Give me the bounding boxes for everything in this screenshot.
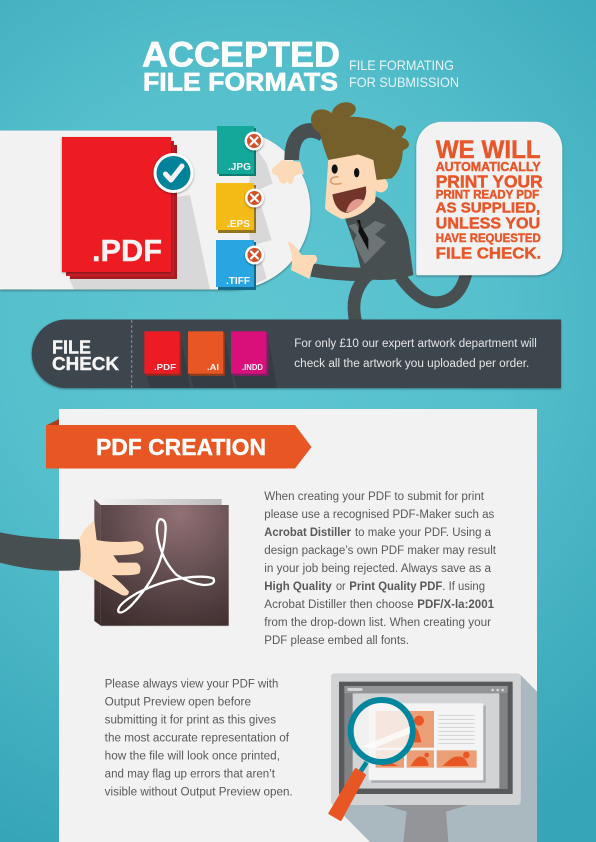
- ribbon heading: [46, 419, 312, 468]
- character raised arm: [292, 131, 323, 160]
- character eyes: [332, 164, 359, 177]
- icon: acrobat book and hand: [0, 499, 229, 626]
- body text two: [105, 679, 293, 799]
- body text one: in your job being rejected. Always save as a: [264, 563, 492, 575]
- character hair: [311, 102, 409, 180]
- icon: pdf file stack: .PDF: [92, 233, 162, 268]
- subtitle: [349, 57, 459, 90]
- body text one: [264, 491, 497, 647]
- icon: pdf card: [144, 331, 182, 376]
- magnifier lens: [351, 700, 413, 762]
- panel: pdf creation: [0, 409, 537, 842]
- callout: UNLESS YOU: [436, 215, 540, 232]
- file check description: [294, 338, 537, 370]
- body text one: from the drop-down list. When creating your: [264, 617, 491, 629]
- character mouth: [332, 186, 366, 213]
- character legs: [354, 272, 467, 322]
- body text two: and may flag up errors that aren’t: [105, 769, 276, 781]
- character face: [325, 154, 377, 219]
- body text two: how the file will look once printed,: [105, 751, 280, 763]
- callout: HAVE REQUESTED: [436, 233, 541, 245]
- file check description: check all the artwork you uploaded per order.: [294, 358, 529, 370]
- icon: ai card: [188, 331, 225, 376]
- character suit: [345, 197, 413, 280]
- ribbon heading: PDF CREATION: [96, 434, 266, 460]
- body text one: High Quality: [264, 581, 332, 593]
- body text two: submitting it for print as this gives: [105, 715, 276, 727]
- body text one: Acrobat Distiller then choose: [264, 599, 414, 611]
- title: FILE FORMATS: [143, 69, 338, 97]
- file check description: For only £10 our expert artwork department will: [294, 338, 537, 350]
- character neck and collar: [345, 195, 378, 228]
- panel: file check bar: [32, 320, 561, 388]
- file check card shadows: [146, 335, 277, 388]
- icon: eps file: [216, 183, 264, 233]
- callout: AS SUPPLIED,: [436, 200, 540, 216]
- body text one: design package’s own PDF maker may result: [264, 545, 497, 557]
- panel: white banner: [0, 130, 310, 290]
- icon: jpg file: [217, 126, 264, 176]
- icon: eps file: .EPS: [227, 219, 250, 230]
- character ear: [373, 178, 388, 192]
- body text one: to make your PDF. Using a: [355, 527, 492, 539]
- callout: FILE CHECK.: [436, 245, 541, 262]
- body text one: Print Quality PDF: [349, 581, 442, 593]
- body text two: Output Preview open before: [105, 697, 251, 709]
- magnifier handle: [329, 769, 365, 820]
- arm sleeve: [0, 532, 81, 571]
- icon: indd card: [231, 331, 268, 376]
- character pointing arm: [312, 270, 372, 274]
- illustration: monitor with magnifier: [329, 673, 537, 842]
- character tongue: [346, 199, 364, 213]
- body text two: Please always view your PDF with: [105, 679, 278, 691]
- file check heading: [52, 336, 120, 374]
- icon: ai card: .AI: [207, 362, 219, 372]
- acrobat logo: [118, 519, 214, 612]
- icon: check badge: [154, 153, 194, 193]
- subtitle: FOR SUBMISSION: [349, 74, 459, 90]
- magnifier neck: [360, 762, 367, 772]
- icon: tiff file: .TIFF: [226, 276, 250, 287]
- file check heading: FILE: [52, 336, 91, 357]
- icon: pdf card: .PDF: [154, 362, 176, 372]
- body text two: the most accurate representation of: [105, 733, 290, 745]
- file check heading: CHECK: [52, 353, 120, 374]
- icon: tiff file: [216, 240, 264, 290]
- body text one: When creating your PDF to submit for print: [264, 491, 485, 503]
- body text one: PDF/X-la:2001: [417, 599, 495, 611]
- body text one: PDF please embed all fonts.: [264, 635, 409, 647]
- title: ACCEPTED: [142, 36, 340, 75]
- icon: indd card: .INDD: [242, 362, 263, 372]
- hand: [79, 521, 144, 596]
- character pointing hand: [288, 242, 317, 279]
- callout: PRINT READY PDF: [436, 189, 539, 201]
- callout: [416, 122, 562, 275]
- body text one: . If using: [442, 581, 485, 593]
- body text two: visible without Output Preview open.: [105, 787, 293, 799]
- body text one: please use a recognised PDF-Maker such as: [264, 509, 495, 521]
- subtitle: FILE FORMATING: [349, 57, 454, 73]
- body text one: Acrobat Distiller: [264, 527, 352, 539]
- callout: AUTOMATICALLY: [436, 159, 541, 174]
- title: [142, 36, 340, 97]
- callout: WE WILL: [436, 136, 541, 164]
- callout: PRINT YOUR: [436, 172, 543, 192]
- character: businessman: [272, 102, 467, 322]
- character lapels: [348, 221, 386, 264]
- character tie: [357, 220, 368, 250]
- body text one: or: [336, 581, 346, 593]
- icon: pdf file stack: [62, 137, 177, 279]
- long shadows on banner: [68, 147, 273, 289]
- icon: jpg file: .JPG: [228, 162, 251, 173]
- character nose: [331, 177, 342, 184]
- character raised hand: [272, 160, 304, 184]
